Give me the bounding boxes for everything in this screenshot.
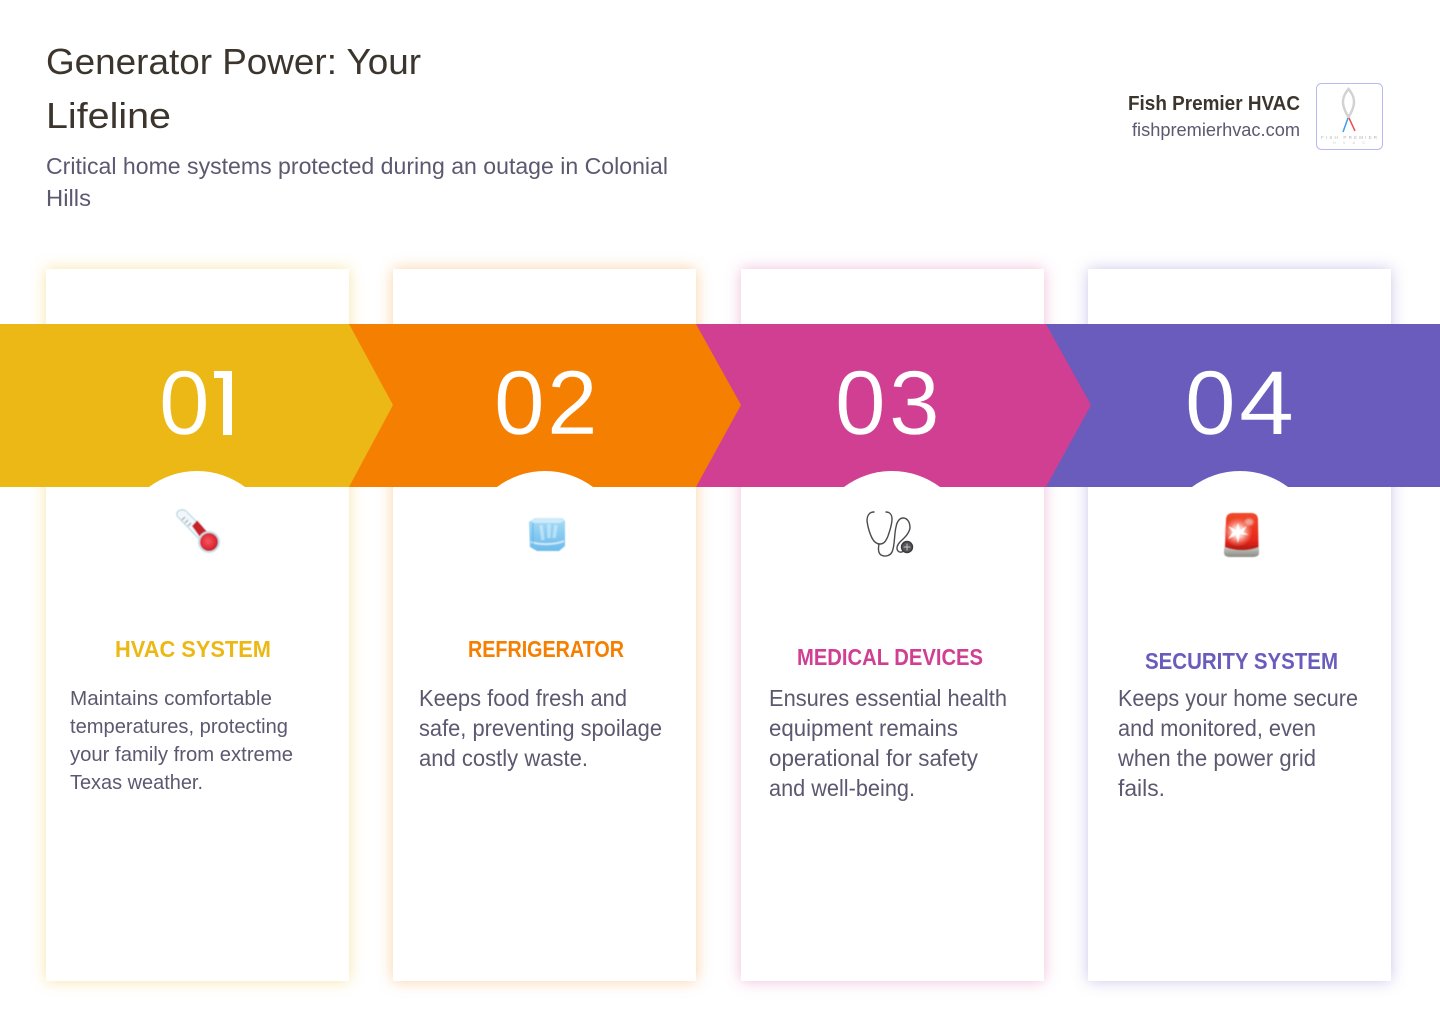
- card 1 description: Maintains comfortable: [70, 687, 272, 710]
- icon circle 3: [844, 471, 940, 487]
- card 1 description: [70, 687, 293, 794]
- card 2 heading: REFRIGERATOR: [468, 636, 624, 662]
- logo: FISH PREMIER: [1321, 135, 1378, 140]
- icon: red siren: [1223, 513, 1259, 557]
- card 3 description: operational for safety: [769, 745, 978, 771]
- logo: [1316, 84, 1382, 150]
- step number 04: 4: [1239, 353, 1294, 454]
- title: Lifeline: [46, 95, 171, 136]
- subtitle: Hills: [46, 185, 91, 211]
- panel: refrigerator card background: [393, 269, 696, 981]
- card 3 description: Ensures essential health: [769, 685, 1007, 711]
- brand name and website: Fish Premier HVAC: [1128, 93, 1300, 115]
- icon: ice cube: [529, 518, 565, 551]
- panel: HVAC card background: [46, 269, 349, 981]
- step number 04: [1185, 353, 1294, 454]
- step number 02: [494, 353, 598, 454]
- card 4 description: [1117, 685, 1358, 801]
- subtitle: [46, 153, 668, 211]
- arrow: step 01 chevron: [0, 324, 393, 487]
- subtitle: Critical home systems protected during an outage in Colonial: [46, 153, 668, 179]
- card 4 heading: SECURITY SYSTEM: [1145, 648, 1338, 674]
- step number 01: [162, 370, 232, 435]
- logo: HVAC: [1333, 141, 1365, 145]
- card 1 description: Texas weather.: [70, 771, 203, 794]
- icon circle 2: [497, 471, 593, 487]
- step number 01: 0: [159, 353, 210, 454]
- card 2 description: Keeps food fresh and: [419, 685, 627, 711]
- step number 02: 2: [547, 353, 598, 454]
- card 3 description: and well-being.: [769, 775, 915, 801]
- icon circle 1: [149, 471, 245, 487]
- infographic artwork: [0, 48, 1440, 801]
- card 3 description: equipment remains: [769, 715, 958, 741]
- brand name and website: [1128, 93, 1300, 140]
- card 3 heading: MEDICAL DEVICES: [797, 644, 983, 670]
- arrow: step 03 chevron: [696, 324, 1091, 487]
- step number 02: 0: [494, 353, 545, 454]
- card 2 description: safe, preventing spoilage: [419, 715, 662, 741]
- card 2 description: [419, 685, 662, 771]
- arrow: step 02 chevron: [349, 324, 741, 487]
- step number 01: 1: [194, 353, 245, 454]
- card 3 description: [769, 685, 1007, 801]
- card 1 description: your family from extreme: [70, 743, 293, 766]
- title: Generator Power: Your: [46, 41, 421, 82]
- step number 03: 0: [835, 353, 886, 454]
- panel: medical devices card background: [741, 269, 1044, 981]
- card 4 description: fails.: [1118, 775, 1165, 801]
- icon: thermometer: [177, 510, 220, 553]
- panel: security system card background: [1088, 269, 1391, 981]
- step number 03: [835, 353, 940, 454]
- step number 03: 3: [889, 353, 940, 454]
- icon: stethoscope: [867, 512, 912, 556]
- card 1 heading: HVAC SYSTEM: [115, 636, 271, 662]
- card 2 description: and costly waste.: [419, 745, 588, 771]
- card 4 description: and monitored, even: [1118, 715, 1316, 741]
- card 4 description: Keeps your home secure: [1118, 685, 1358, 711]
- title: [46, 41, 421, 136]
- arrow: step 04 chevron: [1046, 324, 1440, 487]
- icon circle 4: [1192, 471, 1288, 487]
- brand name and website: fishpremierhvac.com: [1132, 119, 1300, 140]
- card 1 description: temperatures, protecting: [70, 715, 288, 738]
- card 4 description: when the power grid: [1117, 745, 1316, 771]
- step number 04: 0: [1185, 353, 1236, 454]
